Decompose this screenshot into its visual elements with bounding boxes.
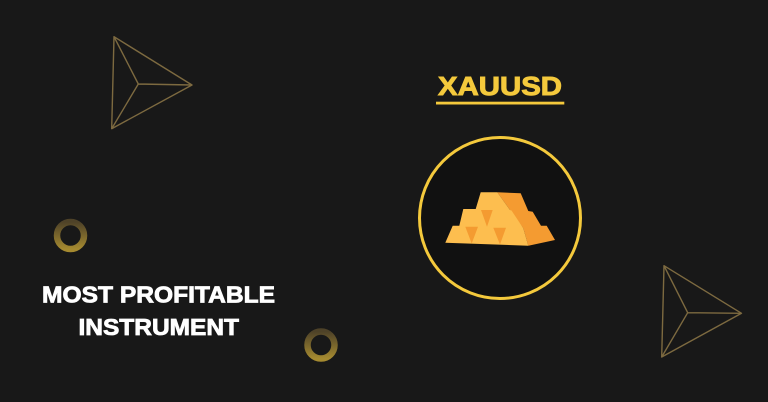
gold bars shaded side <box>497 192 555 246</box>
icon: gold ring left <box>57 222 84 249</box>
heading: most profitable instrument: MOST PROFITABLE <box>42 282 275 308</box>
heading: XAUUSD: XAUUSD <box>438 73 562 101</box>
icon: wireframe triangle bottom right <box>662 266 742 357</box>
heading: most profitable instrument: INSTRUMENT <box>78 314 239 340</box>
triangle notches <box>465 210 506 244</box>
icon: gold bars badge <box>420 138 580 298</box>
heading: most profitable instrument <box>42 282 275 340</box>
gold bars front faces <box>445 192 528 246</box>
heading underline <box>436 102 564 104</box>
icon: wireframe triangle top left <box>112 37 192 129</box>
badge circle <box>420 138 580 298</box>
icon: gold ring bottom <box>308 332 334 358</box>
